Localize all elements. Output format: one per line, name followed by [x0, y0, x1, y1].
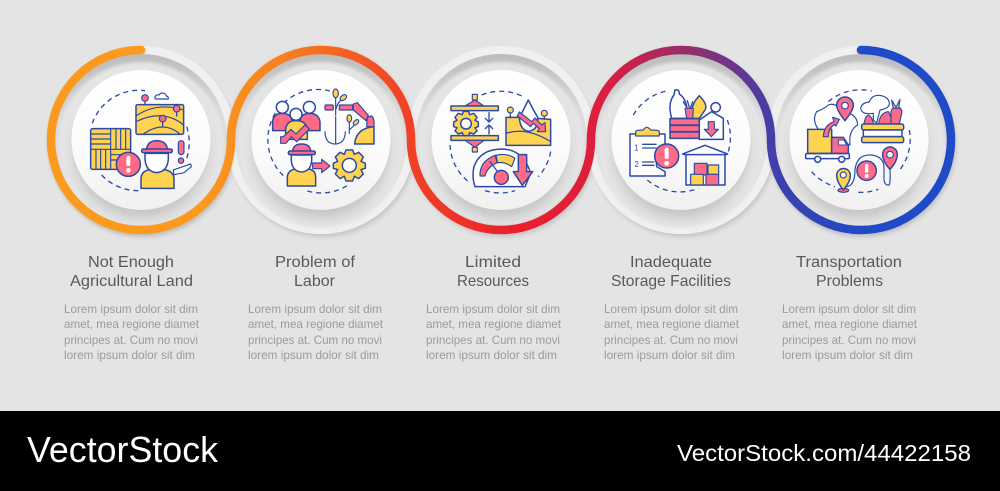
text block: Not Enough Agricultural Land: principes at. Cum no movi — [64, 333, 198, 347]
icon: inadequate storage: 1 — [634, 144, 639, 153]
text block: Inadequate Storage Facilities: Lorem ipsum dolor sit dim — [604, 302, 738, 316]
text block: Not Enough Agricultural Land — [64, 254, 200, 362]
footer banner — [0, 411, 1000, 491]
text block: Problem of Labor — [248, 254, 384, 362]
text block: Not Enough Agricultural Land: lorem ipsum dolor sit dim — [64, 348, 195, 362]
text block: Transportation Problems: Lorem ipsum dolor sit dim — [782, 302, 916, 316]
text block: Not Enough Agricultural Land: amet, mea regione diamet — [64, 317, 200, 331]
footer banner: VectorStock.com/44422158 — [677, 440, 971, 466]
footer banner: VectorStock — [27, 429, 219, 470]
icon: farmer with land shortage — [91, 90, 191, 191]
text block: Inadequate Storage Facilities: principes at. Cum no movi — [604, 333, 738, 347]
text block: Inadequate Storage Facilities — [604, 254, 740, 362]
text block: Limited Resources: Resources — [457, 273, 529, 290]
text block: Not Enough Agricultural Land: Lorem ipsum dolor sit dim — [64, 302, 198, 316]
text block: Limited Resources: principes at. Cum no movi — [426, 333, 560, 347]
text block: Problem of Labor: Lorem ipsum dolor sit dim — [248, 302, 382, 316]
text block: Problem of Labor: Problem of — [275, 254, 356, 271]
text block: Problem of Labor: principes at. Cum no movi — [248, 333, 382, 347]
text block: Problem of Labor: Labor — [294, 273, 336, 290]
text block: Inadequate Storage Facilities: lorem ipsum dolor sit dim — [604, 348, 735, 362]
text block: Limited Resources — [426, 254, 562, 362]
icon: inadequate storage: 2 — [634, 160, 639, 169]
text block: Inadequate Storage Facilities: Storage Facilities — [611, 273, 731, 290]
text block: Limited Resources: Lorem ipsum dolor sit dim — [426, 302, 560, 316]
text block: Transportation Problems: amet, mea regione diamet — [782, 317, 918, 331]
text block: Limited Resources: Limited — [465, 254, 521, 271]
text block: Not Enough Agricultural Land: Not Enough — [88, 254, 174, 271]
text block: Inadequate Storage Facilities: amet, mea regione diamet — [604, 317, 740, 331]
panel: circle bases — [47, 46, 956, 237]
icon: transportation problems — [806, 90, 910, 192]
ribbon: gradient loop connecting the circles — [51, 50, 951, 232]
icon: labor problem — [268, 89, 374, 193]
text block: Transportation Problems: Transportation — [796, 254, 902, 271]
text block: Transportation Problems — [782, 254, 918, 362]
text block: Problem of Labor: amet, mea regione diamet — [248, 317, 384, 331]
text block: Transportation Problems: principes at. Cum no movi — [782, 333, 916, 347]
text block: Inadequate Storage Facilities: Inadequate — [630, 254, 712, 271]
icon: inadequate storage — [630, 90, 730, 192]
text block: Limited Resources: lorem ipsum dolor sit dim — [426, 348, 557, 362]
text block: Transportation Problems: lorem ipsum dolor sit dim — [782, 348, 913, 362]
text block: Transportation Problems: Problems — [816, 273, 883, 290]
text block: Limited Resources: amet, mea regione diamet — [426, 317, 562, 331]
icon: limited resources — [450, 91, 551, 193]
text block: Not Enough Agricultural Land: Agricultural Land — [70, 273, 193, 290]
text block: Problem of Labor: lorem ipsum dolor sit dim — [248, 348, 379, 362]
